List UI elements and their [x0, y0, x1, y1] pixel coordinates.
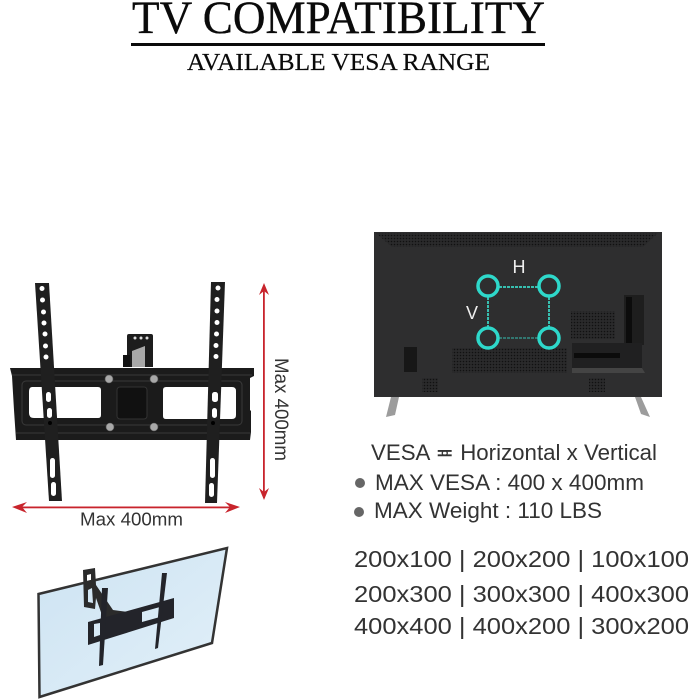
row 1: 200x100 | 200x200 | 100x100 — [354, 546, 689, 572]
bullet: max VESA: MAX VESA : 400 x 400mm — [375, 470, 644, 495]
H label: H — [512, 257, 526, 277]
wall arm assembly — [123, 334, 153, 367]
left bracket strip — [35, 283, 62, 501]
label: horizontal max: Max 400mm — [80, 510, 183, 530]
subtitle: AVAILABLE VESA RANGE — [187, 49, 490, 76]
TV legs — [386, 397, 650, 417]
TV screen — [38, 548, 227, 697]
arrow: vertical 400mm — [259, 283, 269, 500]
arrow: horizontal 400mm — [12, 502, 240, 513]
articulated arm — [83, 568, 128, 622]
ports — [404, 295, 645, 373]
bolts — [105, 375, 158, 431]
VESA size table — [354, 546, 689, 639]
TV back view — [374, 232, 662, 417]
V label: V — [466, 303, 478, 323]
top grille — [376, 233, 658, 247]
bullet: max weight: MAX Weight : 110 LBS — [374, 498, 602, 523]
VESA dashed guides — [488, 287, 549, 338]
wall-mounted TV illustration — [38, 548, 227, 697]
VESA definition: VESA ≖ Horizontal x Vertical — [371, 440, 657, 465]
label: vertical max: Max 400mm — [270, 358, 291, 461]
row 3: 400x400 | 400x200 | 300x200 — [354, 613, 689, 639]
mount diagram — [10, 282, 254, 503]
title rule — [131, 43, 545, 46]
plate flange lines — [12, 375, 252, 433]
vents — [422, 311, 615, 392]
mounted strips — [99, 573, 167, 666]
TV body — [374, 232, 662, 397]
center panel — [117, 387, 147, 419]
mounted plate — [88, 598, 174, 645]
VESA rings — [478, 276, 559, 348]
wall plate — [10, 368, 254, 440]
right bracket strip — [205, 282, 225, 503]
row 2: 200x300 | 300x300 | 400x300 — [354, 581, 689, 607]
